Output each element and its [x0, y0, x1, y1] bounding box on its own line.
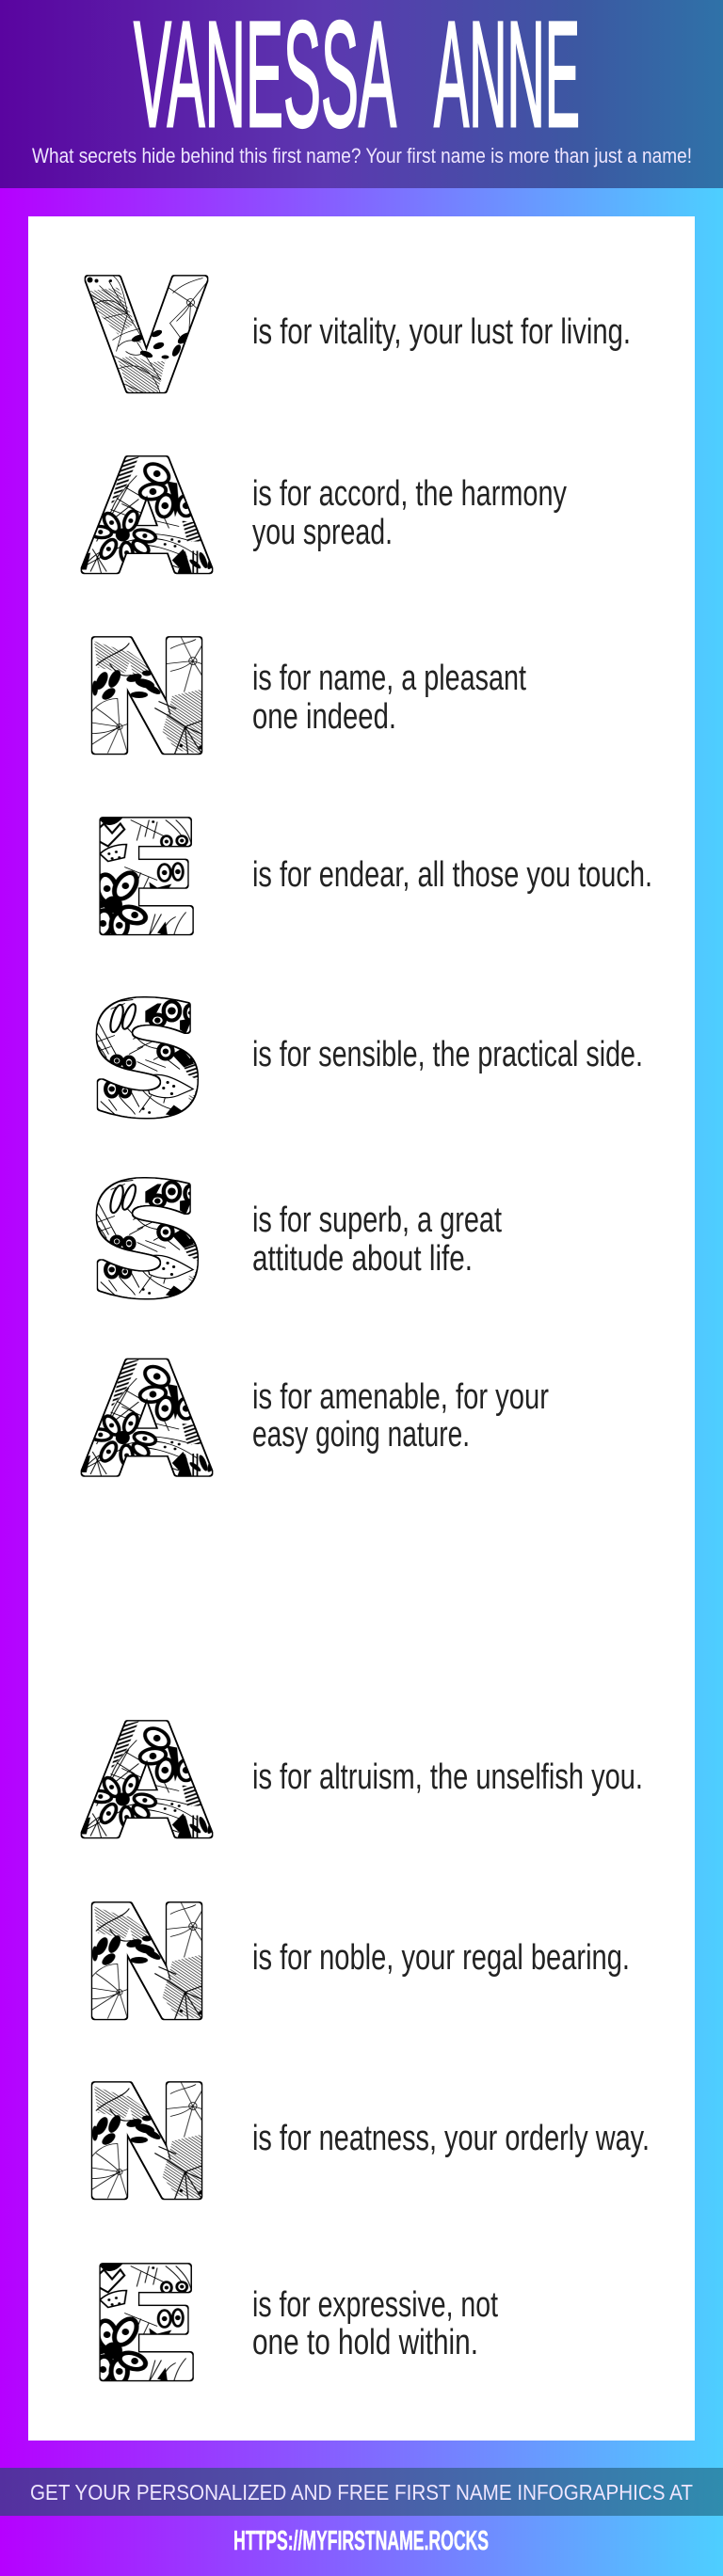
icon: letter S: S — [88, 1154, 206, 1329]
text: N meaning — [252, 659, 526, 737]
footer url: HTTPS://MYFIRSTNAME.ROCKS — [233, 2526, 489, 2556]
icon: letter A: A — [85, 431, 209, 606]
text: A meaning: you spread. — [252, 513, 393, 552]
footer band — [0, 2468, 723, 2516]
text: E meaning — [252, 2285, 498, 2362]
text: A meaning — [252, 1377, 549, 1455]
text: A meaning: is for accord, the harmony — [252, 474, 567, 514]
text: S meaning: attitude about life. — [252, 1239, 473, 1279]
text: N meaning: is for name, a pleasant — [252, 659, 526, 698]
text: E meaning: one to hold within. — [252, 2323, 478, 2362]
text: S meaning: is for superb, a great — [252, 1201, 502, 1240]
icon: letter N: N — [81, 1876, 213, 2052]
icon: letter A: A — [85, 1695, 209, 1870]
icon: letter N: N — [81, 611, 213, 787]
icon: letter N: N — [81, 2056, 213, 2232]
panel: white content card — [28, 216, 695, 2441]
text: E meaning: is for expressive, not — [252, 2285, 498, 2325]
text: N meaning: one indeed. — [252, 697, 396, 737]
icon: letter V: V — [88, 248, 205, 425]
icon: letter A: A — [85, 1333, 209, 1509]
icon: letter E: E — [88, 792, 201, 967]
icon: letter S: S — [88, 974, 206, 1149]
text: A meaning: is for amenable, for your — [252, 1377, 549, 1417]
icon: letter E: E — [88, 2238, 201, 2413]
text: A meaning: easy going nature. — [252, 1415, 470, 1455]
header band — [0, 0, 723, 188]
text: S meaning — [252, 1201, 502, 1279]
text: A meaning — [252, 474, 567, 552]
